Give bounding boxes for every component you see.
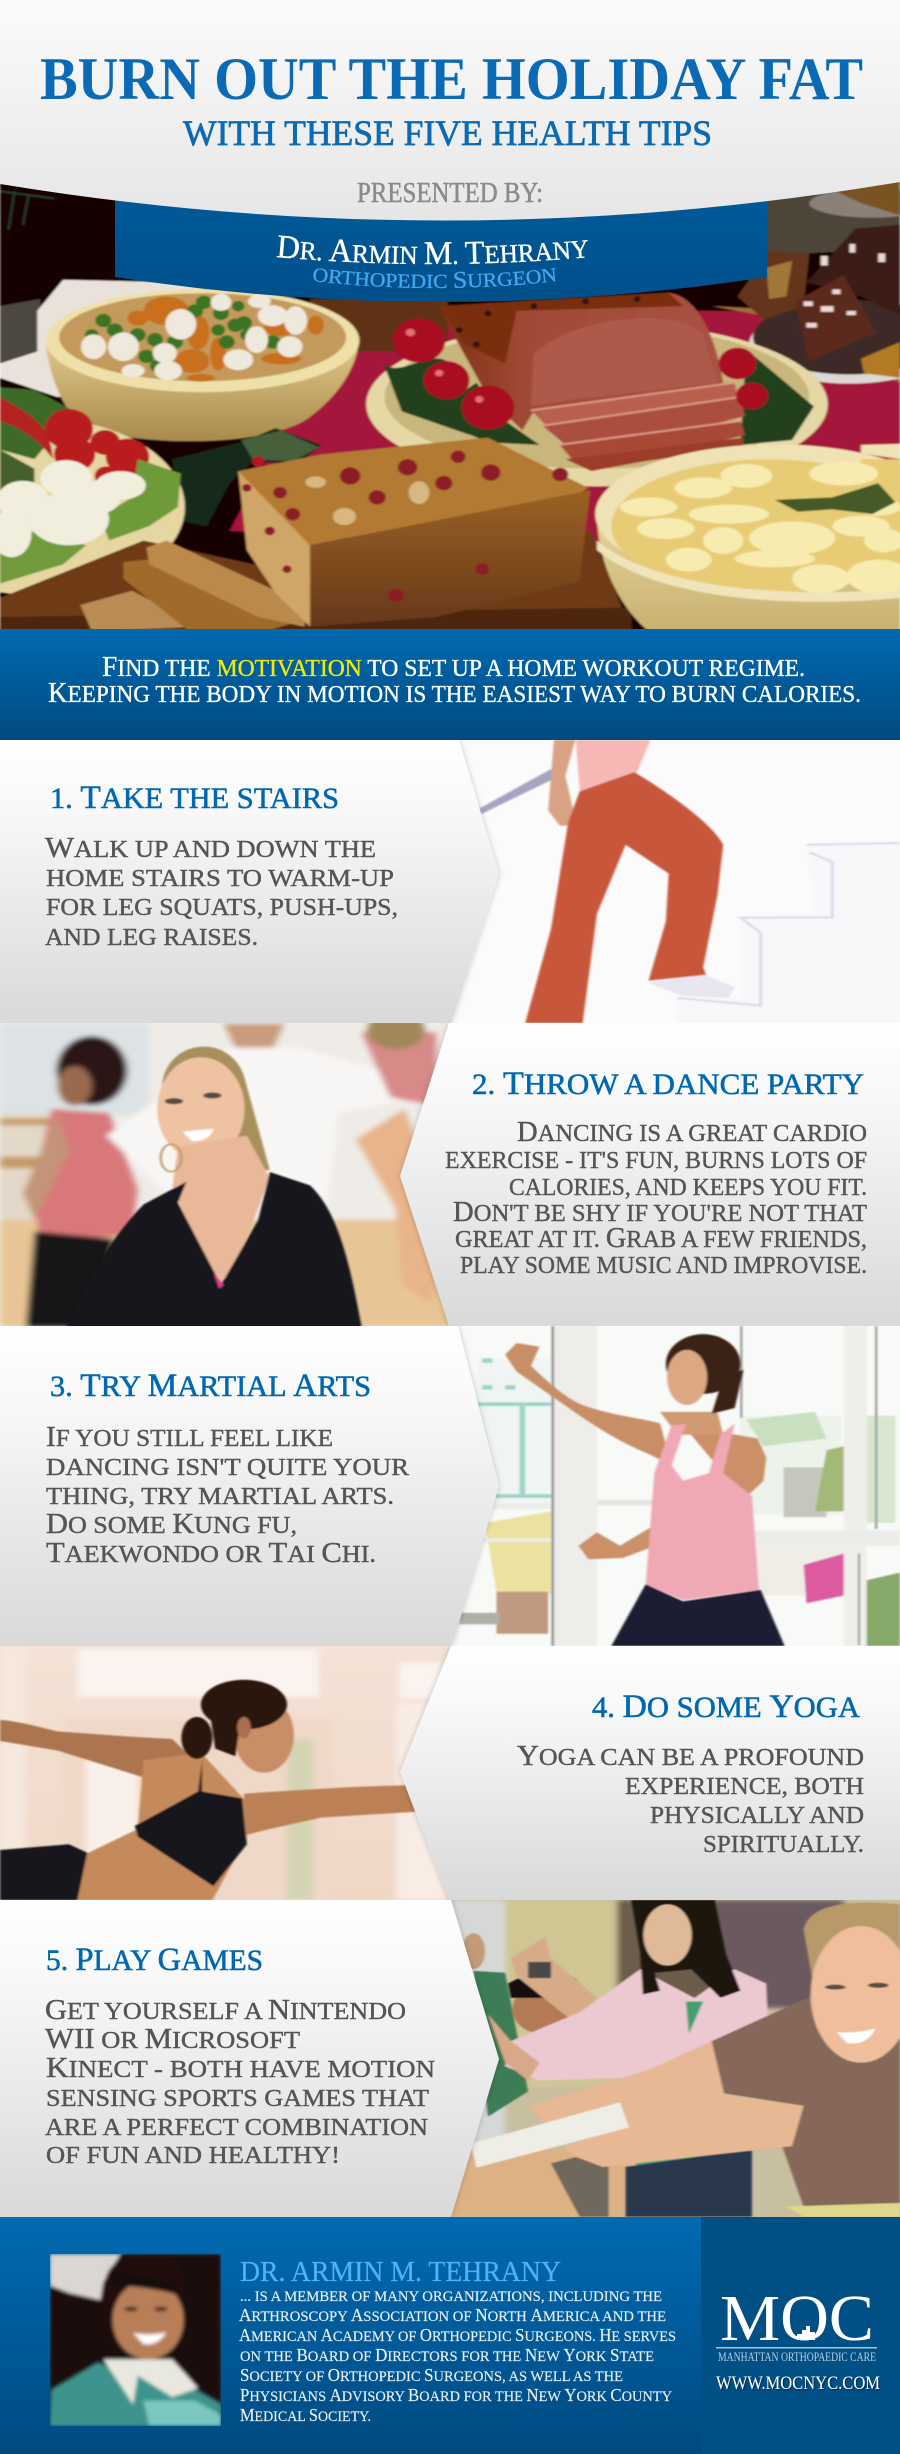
photo: friends playing motion games	[451, 1900, 900, 2217]
heading: 3. TRY MARTIAL ARTS	[50, 1368, 371, 1404]
vegetable plate left	[0, 387, 185, 595]
presented by: PRESENTED BY:	[357, 177, 543, 209]
header panel	[0, 0, 900, 221]
intro line 2: KEEPING THE BODY IN MOTION IS THE EASIEST WAY TO BURN CALORIES.	[48, 678, 861, 709]
intro band	[0, 629, 900, 740]
body text: EXPERIENCE, BOTH	[625, 1774, 864, 1800]
body text	[46, 1422, 409, 1569]
presenter name: DR. ARMIN M. TEHRANY	[276, 235, 588, 264]
body text: PLAY SOME MUSIC AND IMPROVISE.	[460, 1253, 867, 1279]
body text: GET YOURSELF A NINTENDO	[45, 1995, 406, 2026]
doctor biography: ARTHROSCOPY ASSOCIATION OF NORTH AMERICA AND THE	[239, 2305, 666, 2325]
doctor biography	[239, 2289, 676, 2425]
panel	[0, 1900, 499, 2217]
body text: SPIRITUALLY.	[703, 1832, 864, 1858]
subtitle: WITH THESE FIVE HEALTH TIPS	[183, 113, 712, 153]
photo: woman in yoga pose	[0, 1646, 451, 1900]
body text	[517, 1741, 864, 1858]
body text: DON'T BE SHY IF YOU'RE NOT THAT	[453, 1197, 867, 1228]
wood board	[0, 530, 624, 618]
body text: EXERCISE - IT'S FUN, BURNS LOTS OF	[445, 1148, 867, 1174]
lace cloth	[0, 280, 218, 397]
title: BURN OUT THE HOLIDAY FAT	[40, 46, 863, 112]
heading: 1. TAKE THE STAIRS	[50, 780, 339, 816]
body text: PHYSICALLY AND	[650, 1803, 864, 1829]
doctor biography: MEDICAL SOCIETY.	[240, 2405, 371, 2425]
heading: 2. THROW A DANCE PARTY	[472, 1066, 864, 1102]
body text	[445, 1117, 867, 1279]
body text: IF YOU STILL FEEL LIKE	[46, 1422, 333, 1453]
body text: AND LEG RAISES.	[45, 925, 258, 951]
panel	[400, 1023, 900, 1326]
heading: 4. DO SOME YOGA	[592, 1689, 860, 1725]
icon: skyline in logo	[797, 2326, 815, 2340]
body text: THING, TRY MARTIAL ARTS.	[46, 1484, 394, 1510]
section 4: do some yoga	[0, 1646, 900, 1900]
section 2: throw a dance party	[0, 1011, 900, 1327]
potato bowl	[595, 444, 900, 631]
doctor biography: SOCIETY OF ORTHOPEDIC SURGEONS, AS WELL AS THE	[240, 2365, 623, 2385]
doctor biography: AMERICAN ACADEMY OF ORTHOPEDIC SURGEONS. HE SERVES	[239, 2325, 676, 2345]
body text: GREAT AT IT. GRAB A FEW FRIENDS,	[455, 1223, 867, 1254]
banner: presenter name	[115, 200, 767, 302]
body text: TAEKWONDO OR TAI CHI.	[46, 1538, 376, 1569]
body text: SENSING SPORTS GAMES THAT	[46, 2086, 429, 2112]
body text: DANCING IS A GREAT CARDIO	[517, 1117, 867, 1148]
footer logo block	[701, 2217, 900, 2454]
heading: 5. PLAY GAMES	[46, 1942, 263, 1978]
website: WWW.MOCNYC.COM	[716, 2373, 880, 2394]
section 5: play games	[0, 1900, 900, 2217]
body text: YOGA CAN BE A PROFOUND	[517, 1741, 864, 1772]
logo: MOC: MOC	[720, 2282, 874, 2355]
portrait of the doctor	[50, 2254, 221, 2426]
body text: ARE A PERFECT COMBINATION	[45, 2115, 428, 2141]
photo: holiday food spread	[0, 163, 900, 631]
doctor name: DR. ARMIN M. TEHRANY	[240, 2257, 561, 2288]
section 3: try martial arts	[0, 1326, 900, 1646]
body text	[45, 833, 398, 951]
brownies on plate	[738, 225, 900, 384]
fruit loaf	[80, 438, 590, 631]
doctor biography: ... IS A MEMBER OF MANY ORGANIZATIONS, INCLUDING THE	[240, 2289, 662, 2305]
panel	[0, 740, 499, 1023]
photo: woman doing tai chi	[458, 1326, 900, 1646]
section 1: take the stairs	[0, 740, 900, 1023]
panel	[400, 1646, 900, 1900]
vegetable bowl	[46, 289, 359, 441]
photo: dance class	[0, 1023, 449, 1326]
body text: CALORIES, AND KEEPS YOU FIT.	[509, 1175, 867, 1201]
panel	[0, 1326, 499, 1646]
body text: DO SOME KUNG FU,	[46, 1509, 297, 1540]
photo: legs climbing stairs	[479, 740, 900, 1023]
body text: OF FUN AND HEALTHY!	[46, 2143, 340, 2169]
doctor biography: PHYSICIANS ADVISORY BOARD FOR THE NEW YORK COUNTY	[240, 2385, 672, 2405]
body text: FOR LEG SQUATS, PUSH-UPS,	[46, 895, 398, 921]
body text: WII OR MICROSOFT	[45, 2024, 300, 2055]
ham platter	[366, 293, 828, 486]
footer	[0, 2217, 900, 2454]
intro line 1: FIND THE MOTIVATION TO SET UP A HOME WORKOUT REGIME.	[102, 652, 805, 683]
body text: HOME STAIRS TO WARM-UP	[46, 866, 394, 892]
doctor biography: ON THE BOARD OF DIRECTORS FOR THE NEW YORK STATE	[240, 2345, 654, 2365]
body text: DANCING ISN'T QUITE YOUR	[46, 1455, 409, 1481]
body text	[45, 1995, 435, 2169]
body text: KINECT - BOTH HAVE MOTION	[46, 2053, 435, 2084]
fir sprig	[172, 428, 321, 526]
body text: WALK UP AND DOWN THE	[45, 833, 376, 864]
presenter role: ORTHOPEDIC SURGEON	[313, 268, 556, 288]
